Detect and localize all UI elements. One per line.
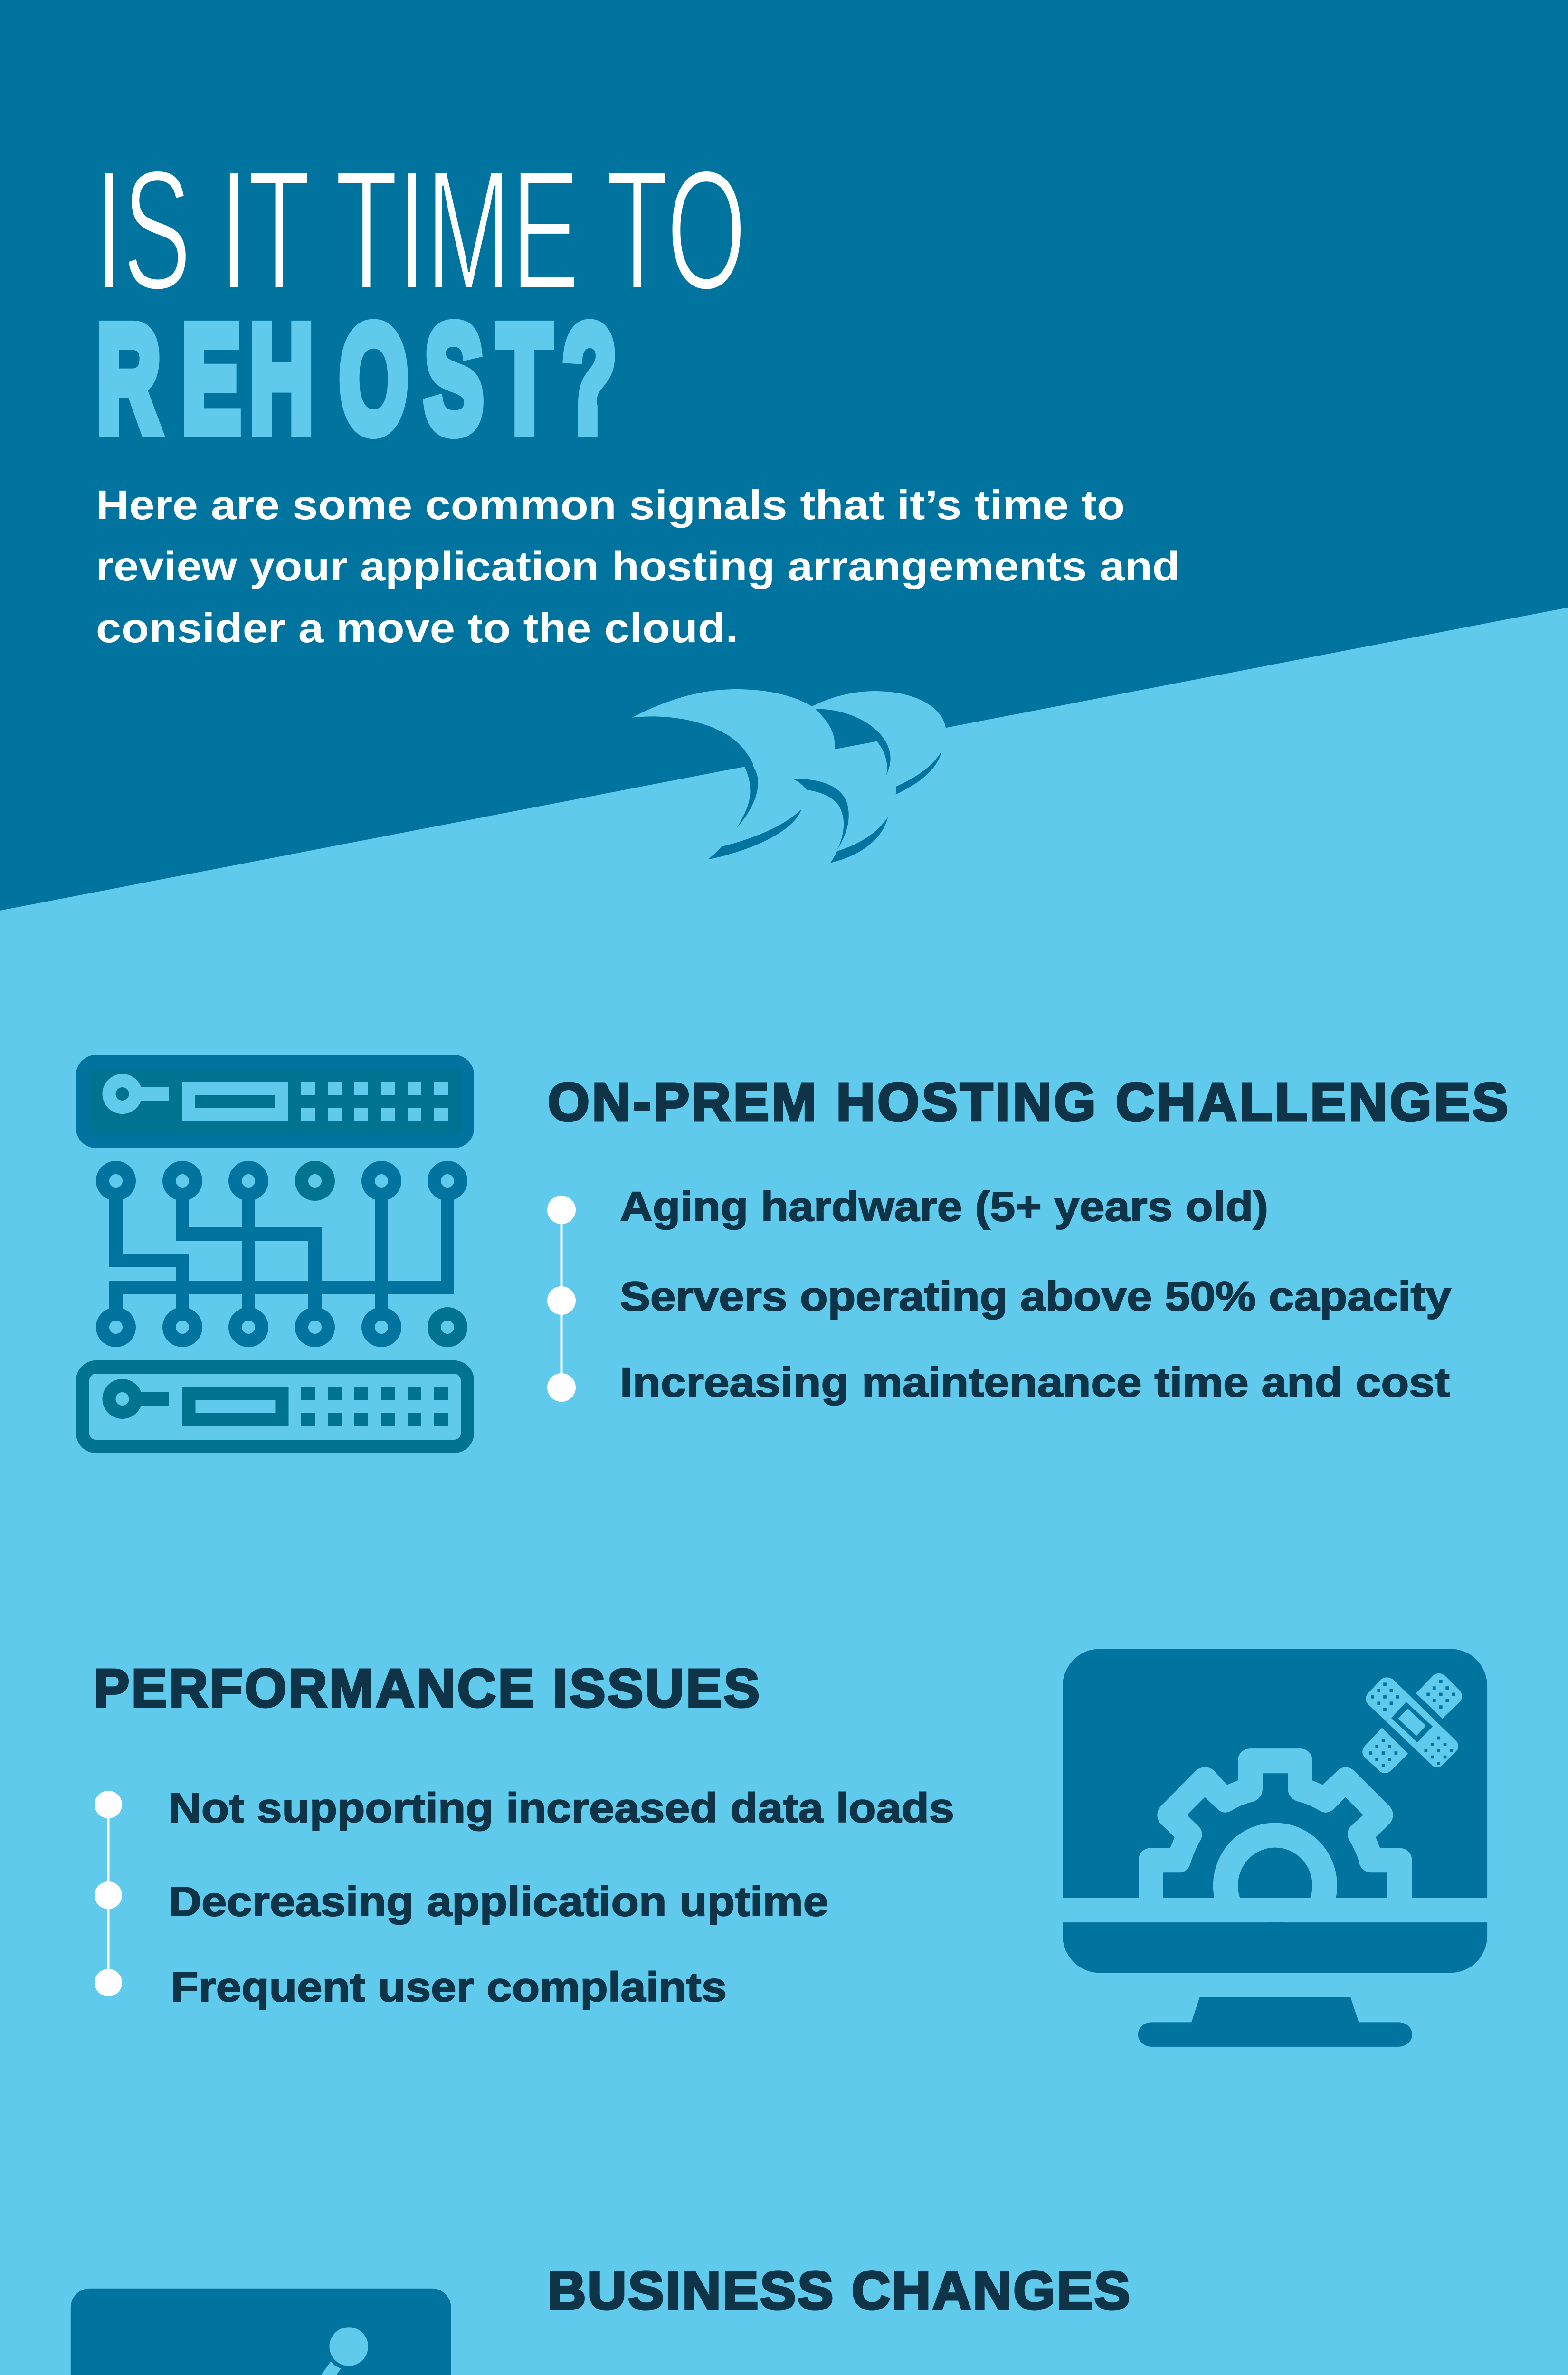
monitor band [1059,1898,1492,1922]
heading: PERFORMANCE ISSUES [94,1658,760,1718]
intro text: review your application hosting arrangements and [96,543,1180,589]
line chart [153,2327,368,2375]
panel: header [0,0,1568,911]
bullet list: Aging hardware (5+ years old) [620,1184,1268,1230]
icon: presentation board with chart [71,2289,451,2375]
icon: bandage [1362,1673,1462,1773]
bottom server unit [83,1367,467,1446]
intro text: Here are some common signals that it’s time to [96,482,1125,528]
bullet list [169,1785,954,2010]
bullet timeline [547,1196,576,1402]
monitor screen [1063,1649,1487,1898]
bullet list [620,1184,1451,1406]
bullet list: Not supporting increased data loads [169,1785,954,1831]
header diagonal background [0,0,1568,911]
bullet list: Frequent user complaints [171,1964,727,2010]
title line 1: IS IT TIME TO [95,135,746,325]
circuit traces and nodes [103,1168,461,1340]
icon: server and circuit [76,1055,474,1446]
panel: performance issues [94,1649,1492,2047]
heading: ON-PREM HOSTING CHALLENGES [548,1072,1508,1132]
icon: whitecap waves [632,689,946,863]
bullet timeline [95,1791,122,1996]
intro text [96,482,1180,651]
bullet list: Increasing maintenance time and cost [620,1359,1450,1406]
top server unit [76,1055,474,1148]
bullet list: Decreasing application uptime [169,1879,828,1925]
gear [1139,1748,1412,1948]
monitor lower bezel [1063,1922,1487,1973]
panel: business changes [71,2261,1494,2375]
icon: monitor with gear and bandage [1059,1649,1492,2047]
board [71,2289,451,2375]
panel: on-prem hosting challenges [76,1055,1508,1446]
bullet list: Servers operating above 50% capacity [620,1273,1451,1320]
title line 2: REHOST? [97,294,617,464]
heading: BUSINESS CHANGES [547,2261,1130,2320]
monitor stand [1138,1997,1412,2047]
intro text: consider a move to the cloud. [96,605,738,651]
